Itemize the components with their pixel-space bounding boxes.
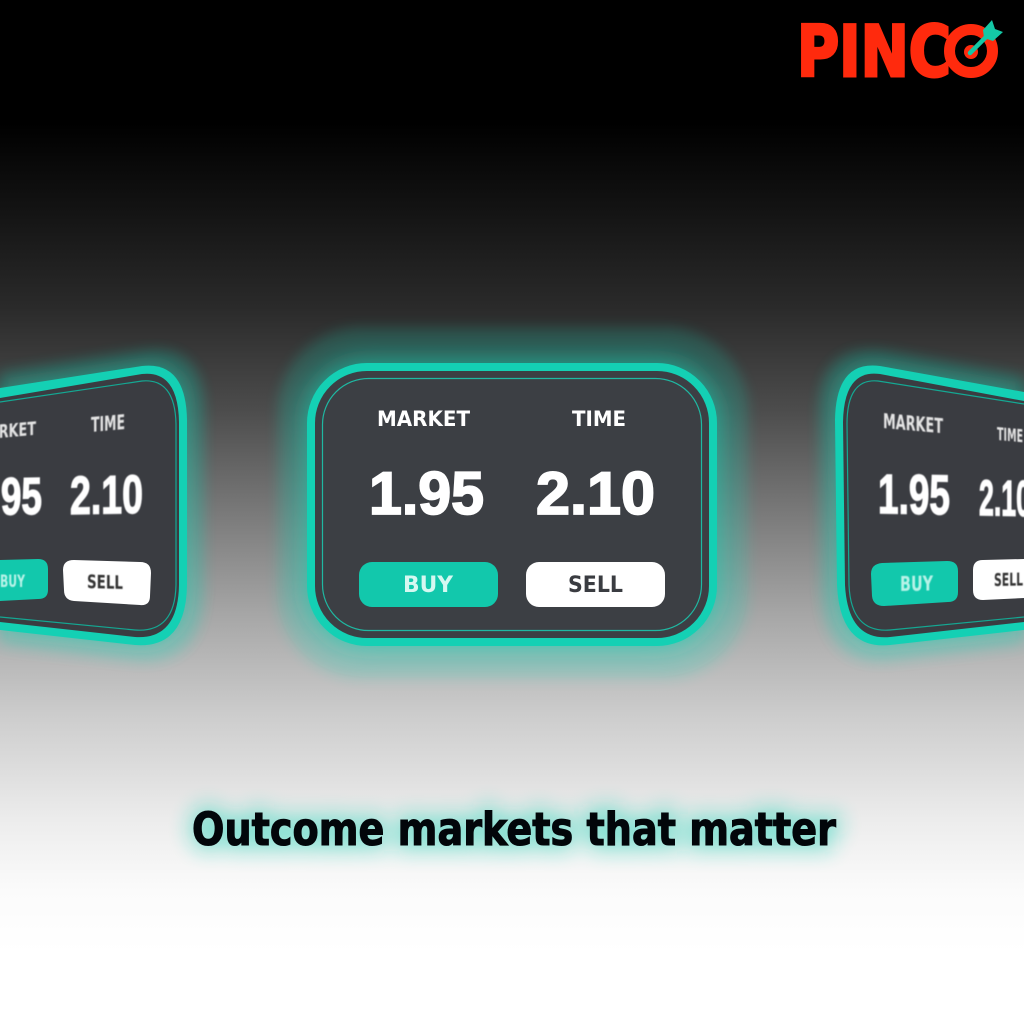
right card body bbox=[843, 374, 1024, 637]
center value: 2.10: 2.10 bbox=[536, 460, 655, 527]
panel: right card bbox=[818, 350, 1024, 662]
center card border bbox=[311, 367, 713, 642]
right buy text: BUY bbox=[900, 571, 933, 596]
center label: market: MARKET bbox=[377, 407, 471, 431]
center label: time: TIME bbox=[572, 407, 626, 431]
left card glow bbox=[0, 365, 187, 645]
title text: Outcome markets that matter bbox=[192, 803, 837, 856]
logo: PINCO bbox=[797, 11, 1003, 93]
right card inner line bbox=[847, 381, 1024, 630]
right label: market: MARKET bbox=[883, 409, 943, 438]
logo target ring bbox=[950, 30, 992, 72]
center buy button bbox=[359, 562, 498, 607]
center sell text: SELL bbox=[568, 573, 623, 598]
left card body bbox=[0, 374, 179, 637]
right sell button bbox=[973, 559, 1024, 600]
center card outer haze bbox=[277, 327, 749, 679]
left card border bbox=[0, 366, 187, 645]
icon: arrow bbox=[970, 20, 1003, 53]
panel: left card bbox=[0, 350, 205, 662]
center value: 1.95: 1.95 bbox=[369, 460, 484, 527]
right buy button bbox=[871, 561, 958, 606]
logo wordmark: PINC bbox=[797, 11, 951, 93]
left buy text: BUY bbox=[0, 572, 25, 592]
right card glow bbox=[836, 365, 1024, 645]
left buy button bbox=[0, 559, 48, 601]
logo bullseye bbox=[964, 45, 978, 59]
right card haze bbox=[818, 350, 1024, 662]
right value: 1.95: 1.95 bbox=[878, 462, 950, 526]
left card inner line bbox=[0, 381, 176, 630]
left sell text: SELL bbox=[87, 571, 123, 594]
center card glow bbox=[303, 359, 721, 650]
right card border bbox=[835, 365, 1024, 645]
center sell button bbox=[526, 562, 665, 607]
title glow: Outcome markets that matter bbox=[192, 803, 837, 856]
left sell button bbox=[63, 560, 151, 605]
title bbox=[192, 803, 837, 856]
center card inner line bbox=[322, 378, 702, 630]
left label: time: TIME bbox=[91, 410, 125, 437]
panel: center card bbox=[277, 327, 749, 679]
left card haze bbox=[0, 350, 205, 662]
left value: 2.10: 2.10 bbox=[70, 465, 143, 526]
center buy text: BUY bbox=[403, 573, 454, 598]
